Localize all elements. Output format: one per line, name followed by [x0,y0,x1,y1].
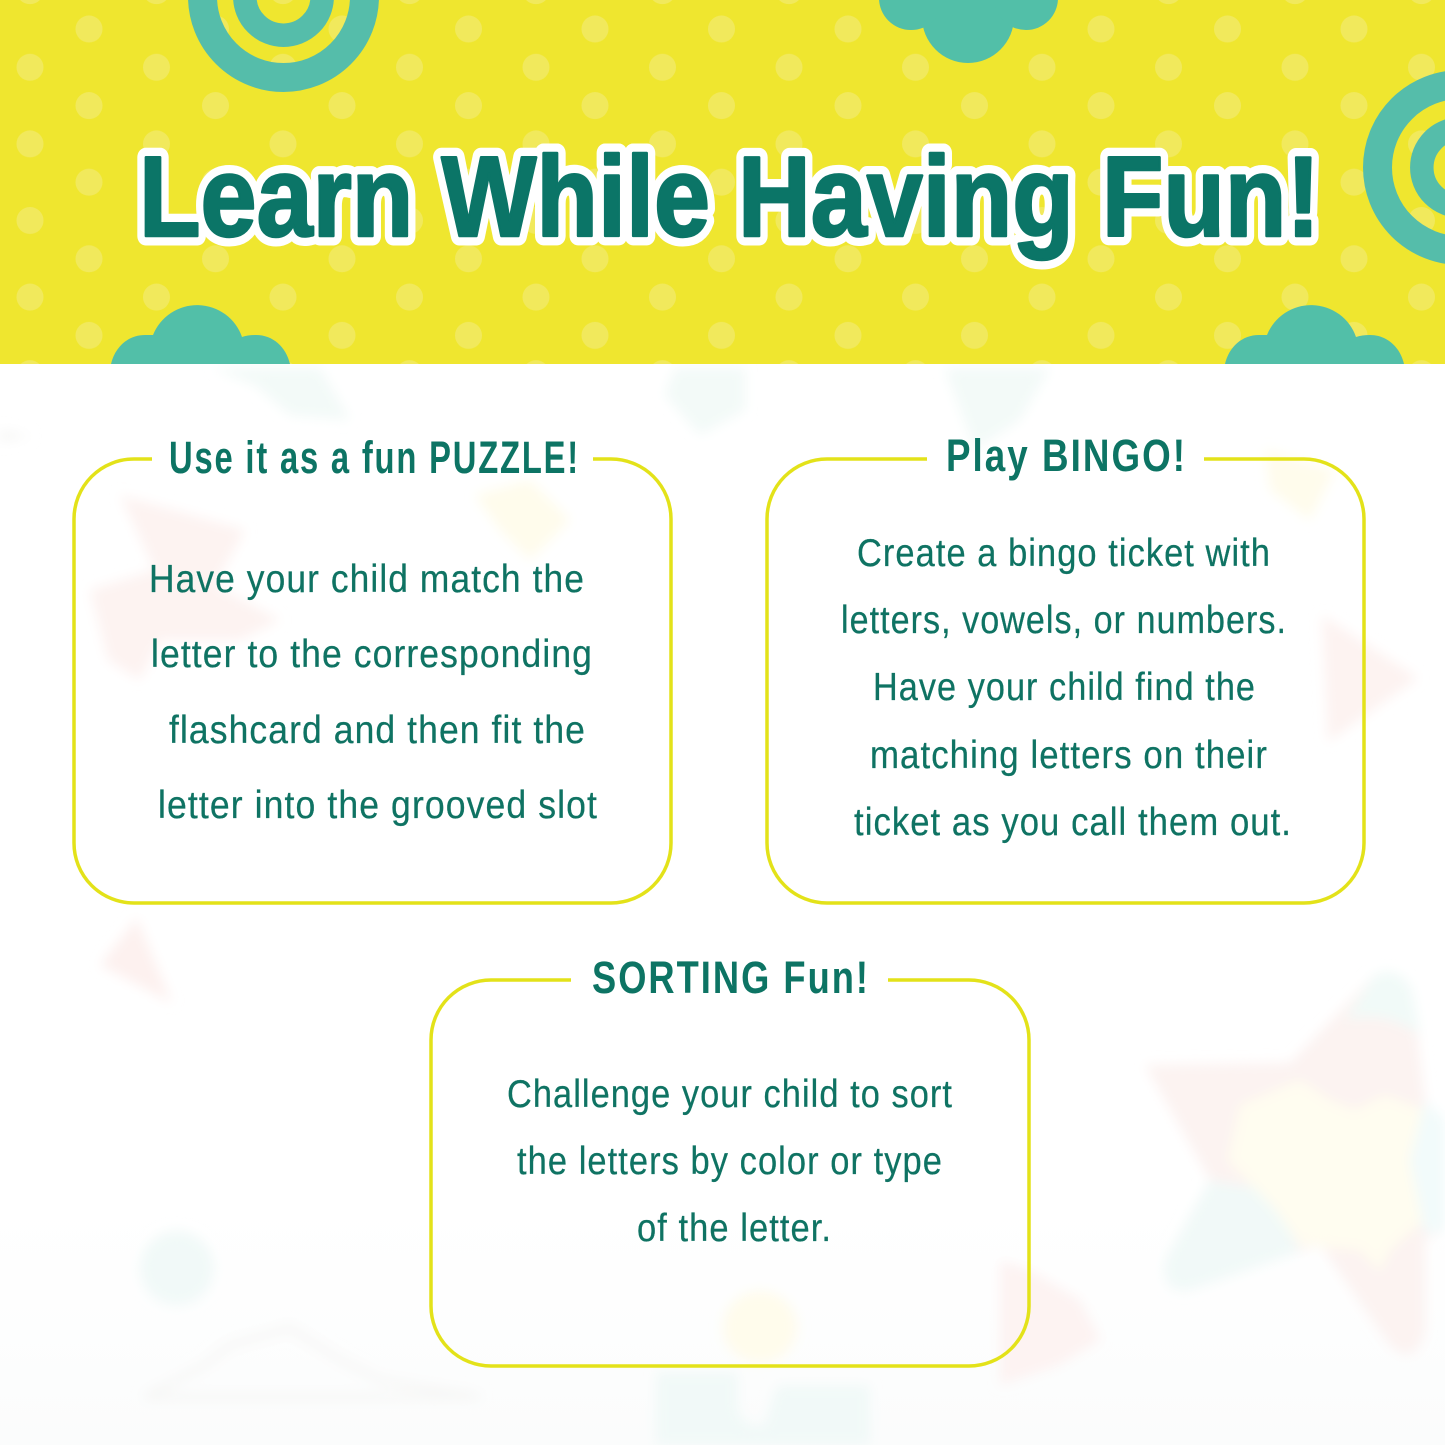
icon: cloud bottom right [1225,305,1404,364]
faded yellow circle [723,1291,797,1363]
body text: matching letters on their [870,734,1268,777]
body text: Create a bingo ticket with [857,532,1271,575]
icon: concentric rings right [1378,84,1445,250]
title: Learn While Having Fun! [139,134,1320,261]
faded pink shape left [90,495,280,680]
faded yellow shapes [475,480,570,560]
faded teal shapes top [212,368,350,420]
panel border [431,980,1029,1366]
body text: Have your child find the [873,666,1256,709]
faded background illustration [0,368,1445,1445]
body text: the letters by color or type [517,1140,943,1183]
heading: Use it as a fun PUZZLE! [169,432,580,483]
faded mountain outline [145,1328,480,1397]
panel: bingo [767,430,1364,903]
panel: puzzle [74,432,671,903]
body text: letter into the grooved slot [158,784,598,827]
body text: ticket as you call them out. [854,801,1292,844]
body text: flashcard and then fit the [169,709,586,752]
body text [841,532,1292,844]
faded pink puzzle piece bottom [1000,1260,1100,1385]
faded triangle left [100,918,172,1003]
icon: cloud bottom left [111,305,290,364]
panel border [767,459,1364,903]
heading: SORTING Fun! [592,952,870,1003]
faded teal circle [140,1231,214,1305]
faded star puzzle [1145,972,1445,1355]
body text: of the letter. [637,1207,832,1250]
faded grey mark [0,430,32,442]
polka dots [0,0,1445,364]
icon: cloud top [879,0,1058,63]
faded triangle right [1322,615,1418,742]
body text [149,558,598,827]
body text: Challenge your child to sort [507,1073,953,1116]
body text [507,1073,953,1250]
panel: sorting [431,952,1029,1366]
heading: Play BINGO! [946,430,1187,481]
header banner [0,0,1445,364]
body text: Have your child match the [149,558,585,601]
icon: concentric rings top left [202,0,364,78]
panel border [74,459,671,903]
faded teal letter U [656,1372,870,1445]
body text: letters, vowels, or numbers. [841,599,1287,642]
title: Learn While Having Fun! [139,134,1320,261]
body text: letter to the corresponding [151,633,593,676]
